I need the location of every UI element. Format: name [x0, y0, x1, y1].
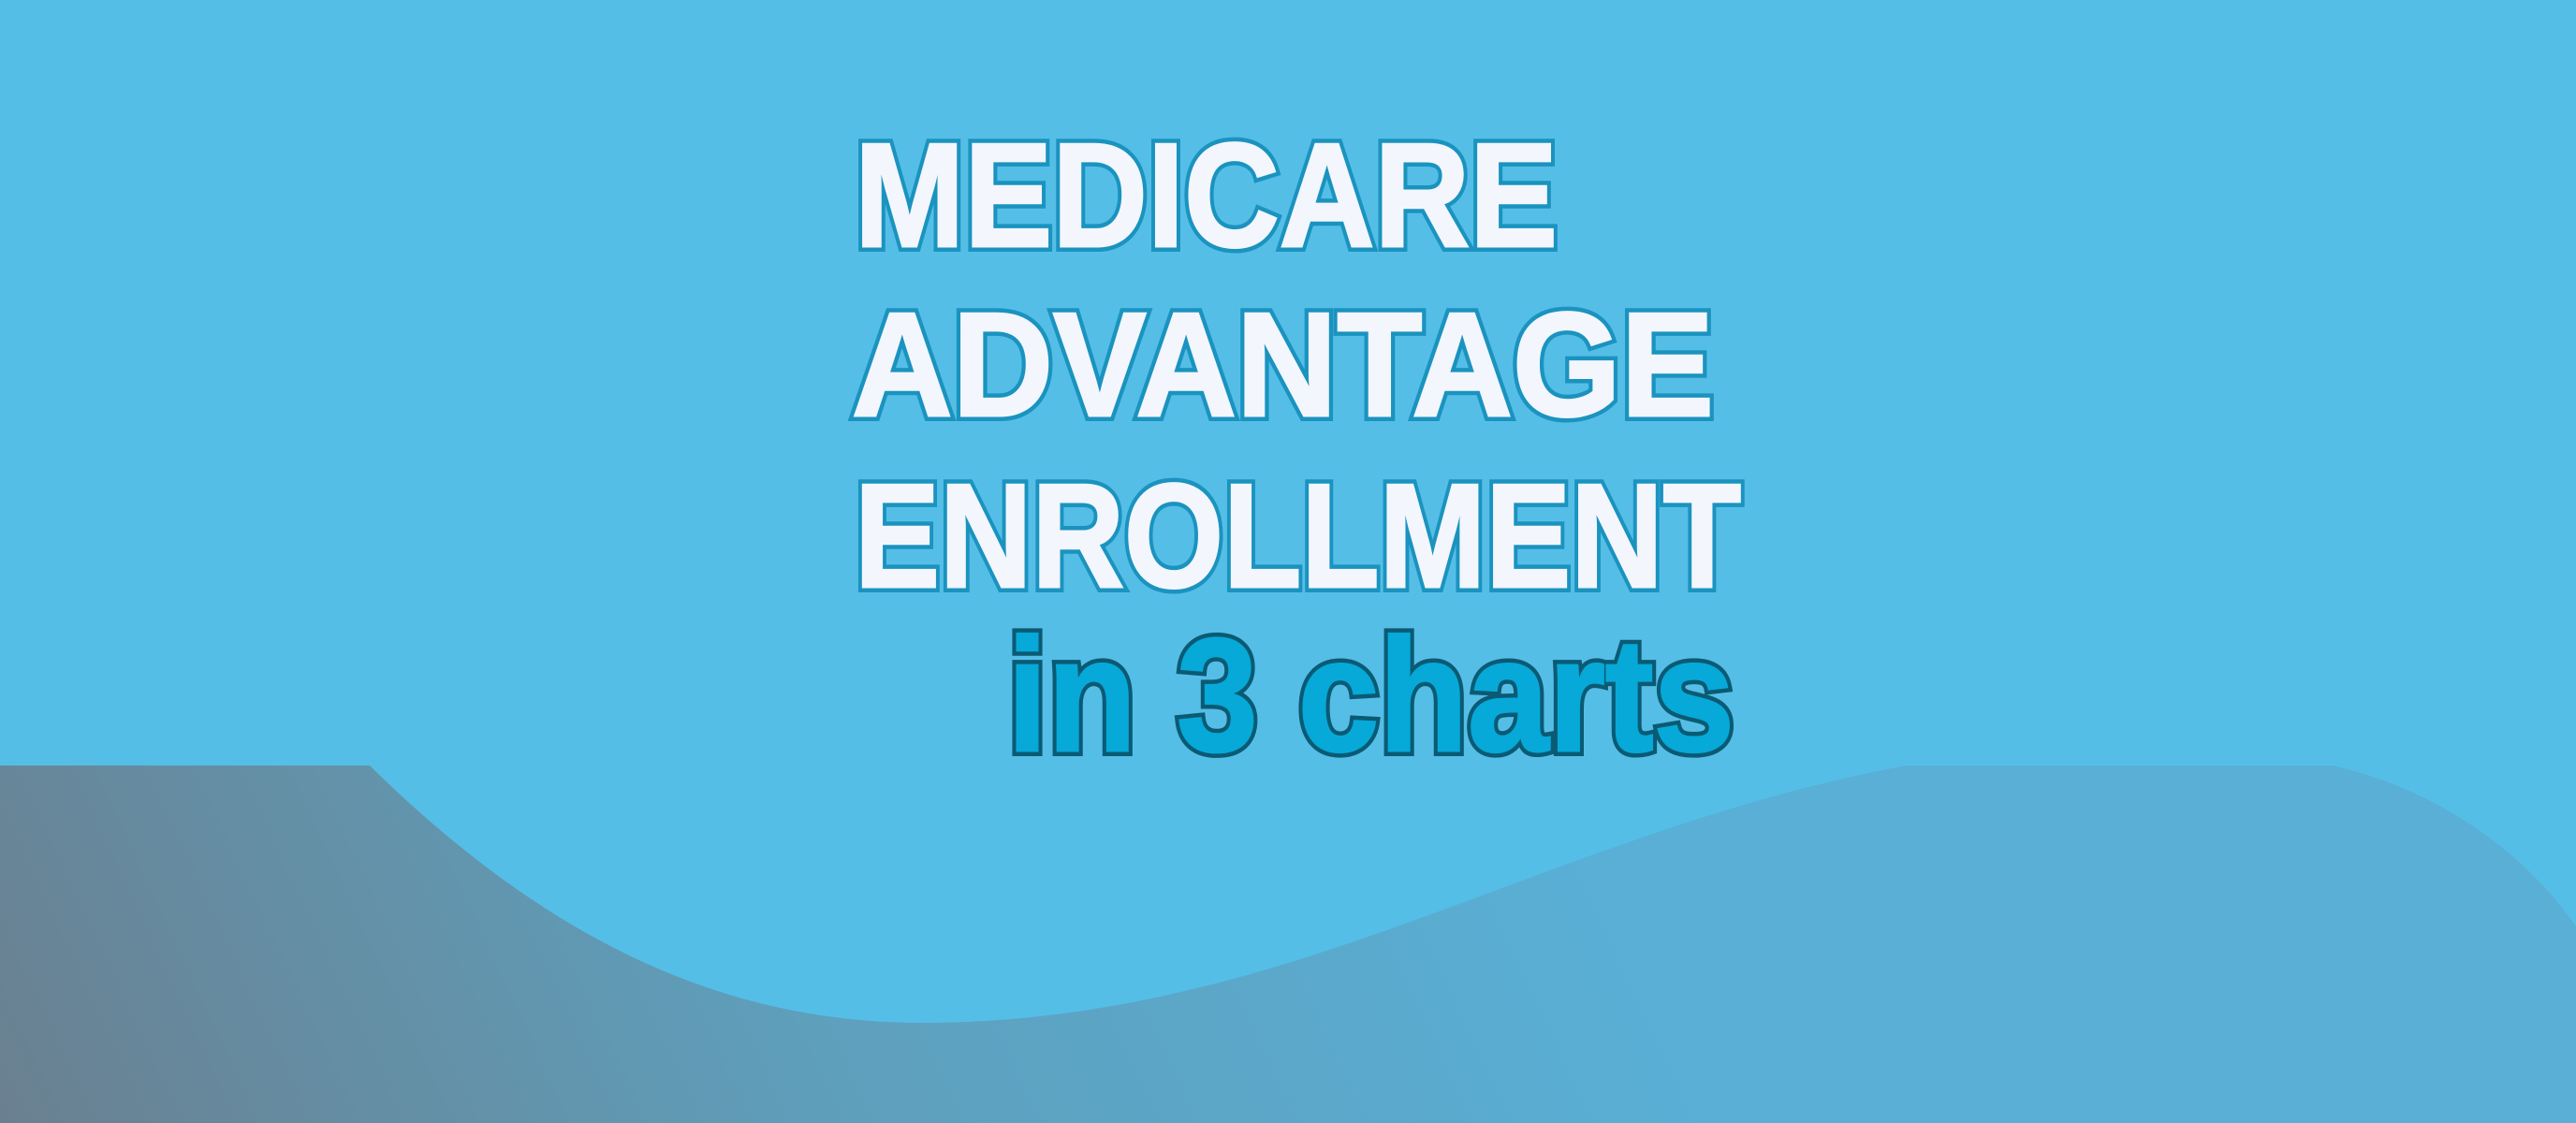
title fill layer: in 3 charts — [1007, 605, 1734, 785]
title fill layer: ADVANTAGE — [852, 283, 1714, 447]
title outline layer — [852, 113, 1741, 785]
bottom wave shape — [0, 766, 2576, 1123]
title — [852, 113, 1741, 785]
title fill layer — [852, 113, 1741, 785]
title outline layer: ADVANTAGE — [852, 283, 1714, 447]
title fill layer: ENROLLMENT — [855, 454, 1741, 619]
title fill layer: MEDICARE — [855, 113, 1558, 278]
title outline layer: ENROLLMENT — [855, 454, 1741, 619]
title outline layer: in 3 charts — [1007, 605, 1734, 785]
title outline layer: MEDICARE — [855, 113, 1558, 278]
